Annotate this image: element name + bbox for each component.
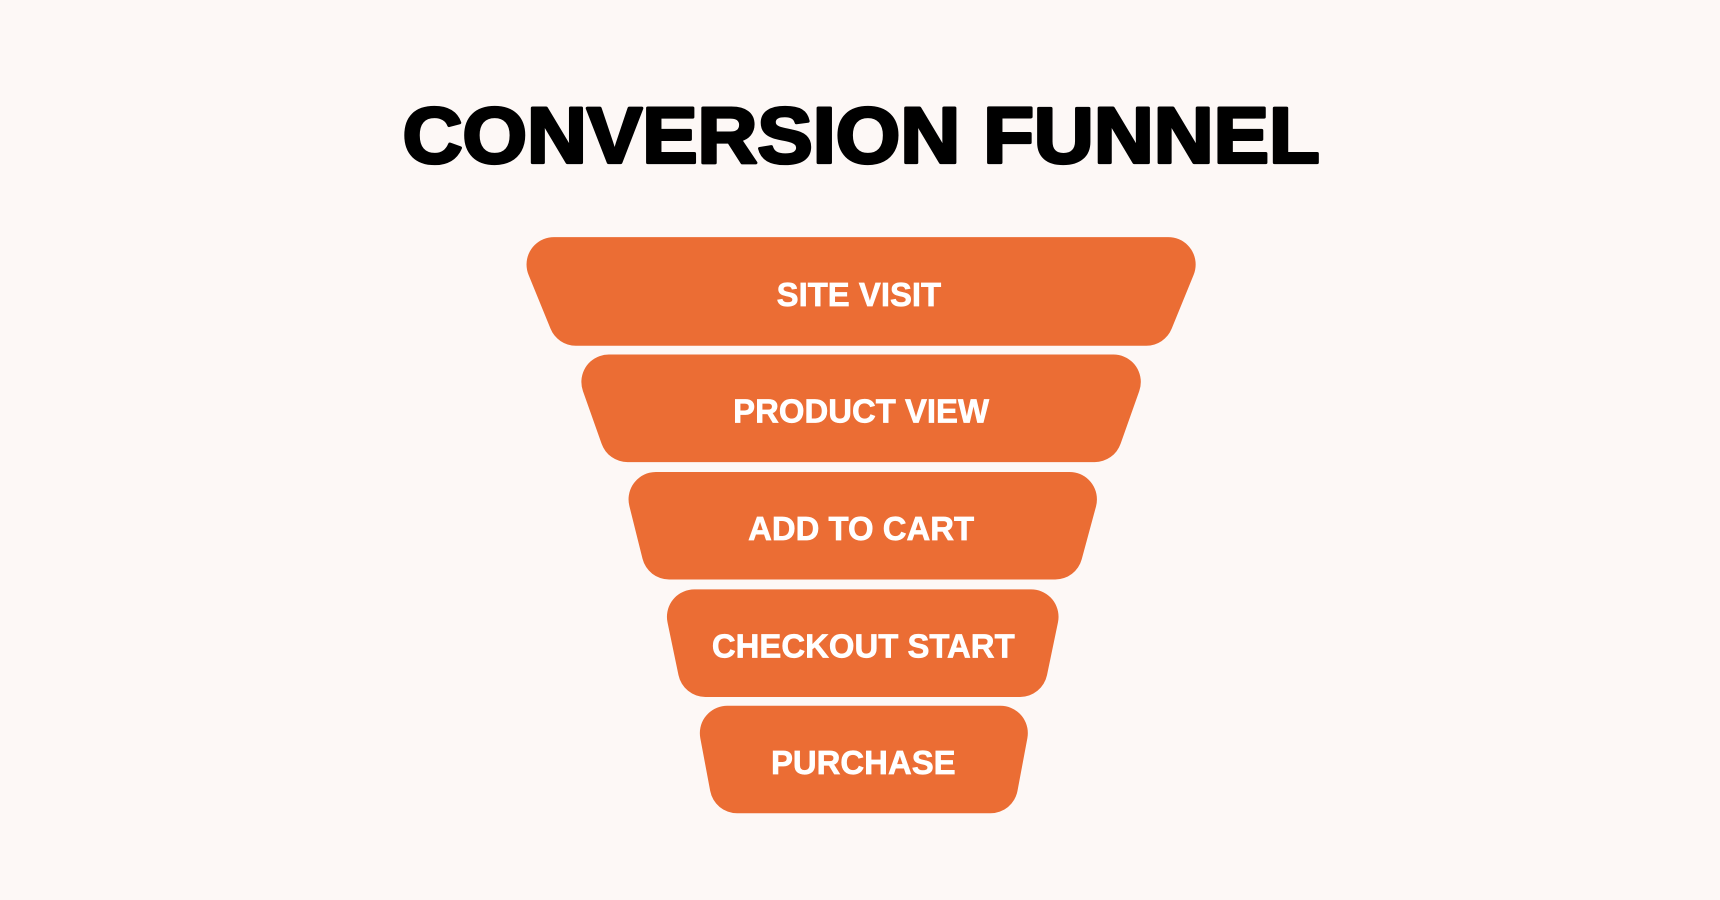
stage: add to cart: ADD TO CART — [748, 510, 974, 547]
stage: checkout start: CHECKOUT START — [712, 627, 1015, 664]
stage: product view — [609, 382, 1113, 435]
stage: purchase: PURCHASE — [771, 744, 956, 781]
stage: add to cart — [656, 499, 1070, 552]
funnel — [554, 265, 1168, 786]
stage: checkout start — [694, 617, 1031, 670]
stage: product view: PRODUCT VIEW — [733, 393, 990, 430]
title: CONVERSION FUNNEL — [403, 90, 1320, 179]
stage: site visit — [554, 265, 1168, 318]
stage: site visit: SITE VISIT — [777, 276, 941, 313]
stage: purchase — [727, 733, 1000, 786]
